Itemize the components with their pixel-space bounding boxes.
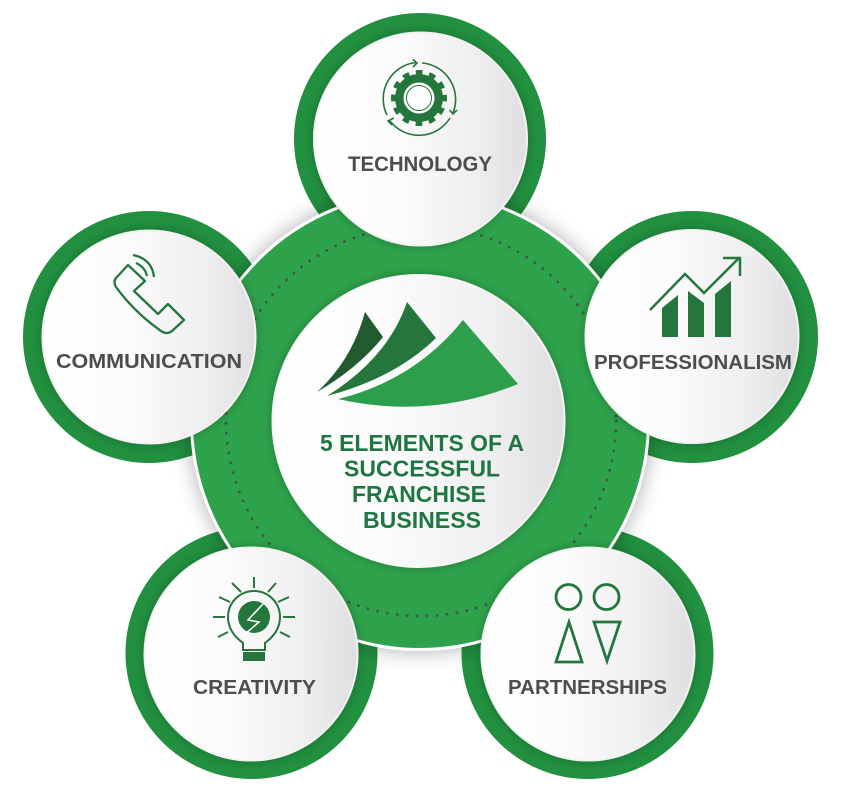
dotted orbit <box>226 226 616 616</box>
logo: mountains <box>317 302 518 407</box>
icon: light bulb <box>213 577 295 661</box>
panel: partnerships <box>482 548 694 760</box>
label: CREATIVITY <box>193 676 316 699</box>
title: SUCCESSFUL <box>344 456 500 482</box>
ring: technology <box>304 22 536 256</box>
main green circle <box>192 192 648 650</box>
ring: creativity <box>135 536 368 770</box>
label: COMMUNICATION <box>56 350 242 373</box>
label: PARTNERSHIPS <box>508 676 667 699</box>
ring: professionalism <box>576 220 808 454</box>
title <box>320 430 524 533</box>
title: FRANCHISE <box>352 481 486 507</box>
panel: center <box>272 275 564 567</box>
title: BUSINESS <box>363 507 481 533</box>
label: TECHNOLOGY <box>348 153 492 176</box>
icon: phone <box>114 255 184 333</box>
title: 5 ELEMENTS OF A <box>320 430 524 456</box>
icon: gear <box>383 60 457 135</box>
icon: partners <box>556 584 620 662</box>
panel: creativity <box>144 548 358 760</box>
ring: partnerships <box>471 536 704 770</box>
icon: growth chart <box>650 258 740 337</box>
panel: professionalism <box>586 230 798 443</box>
panel: communication <box>42 230 256 444</box>
panel: technology <box>314 32 527 246</box>
label: PROFESSIONALISM <box>594 351 792 374</box>
ring: communication <box>32 220 266 454</box>
